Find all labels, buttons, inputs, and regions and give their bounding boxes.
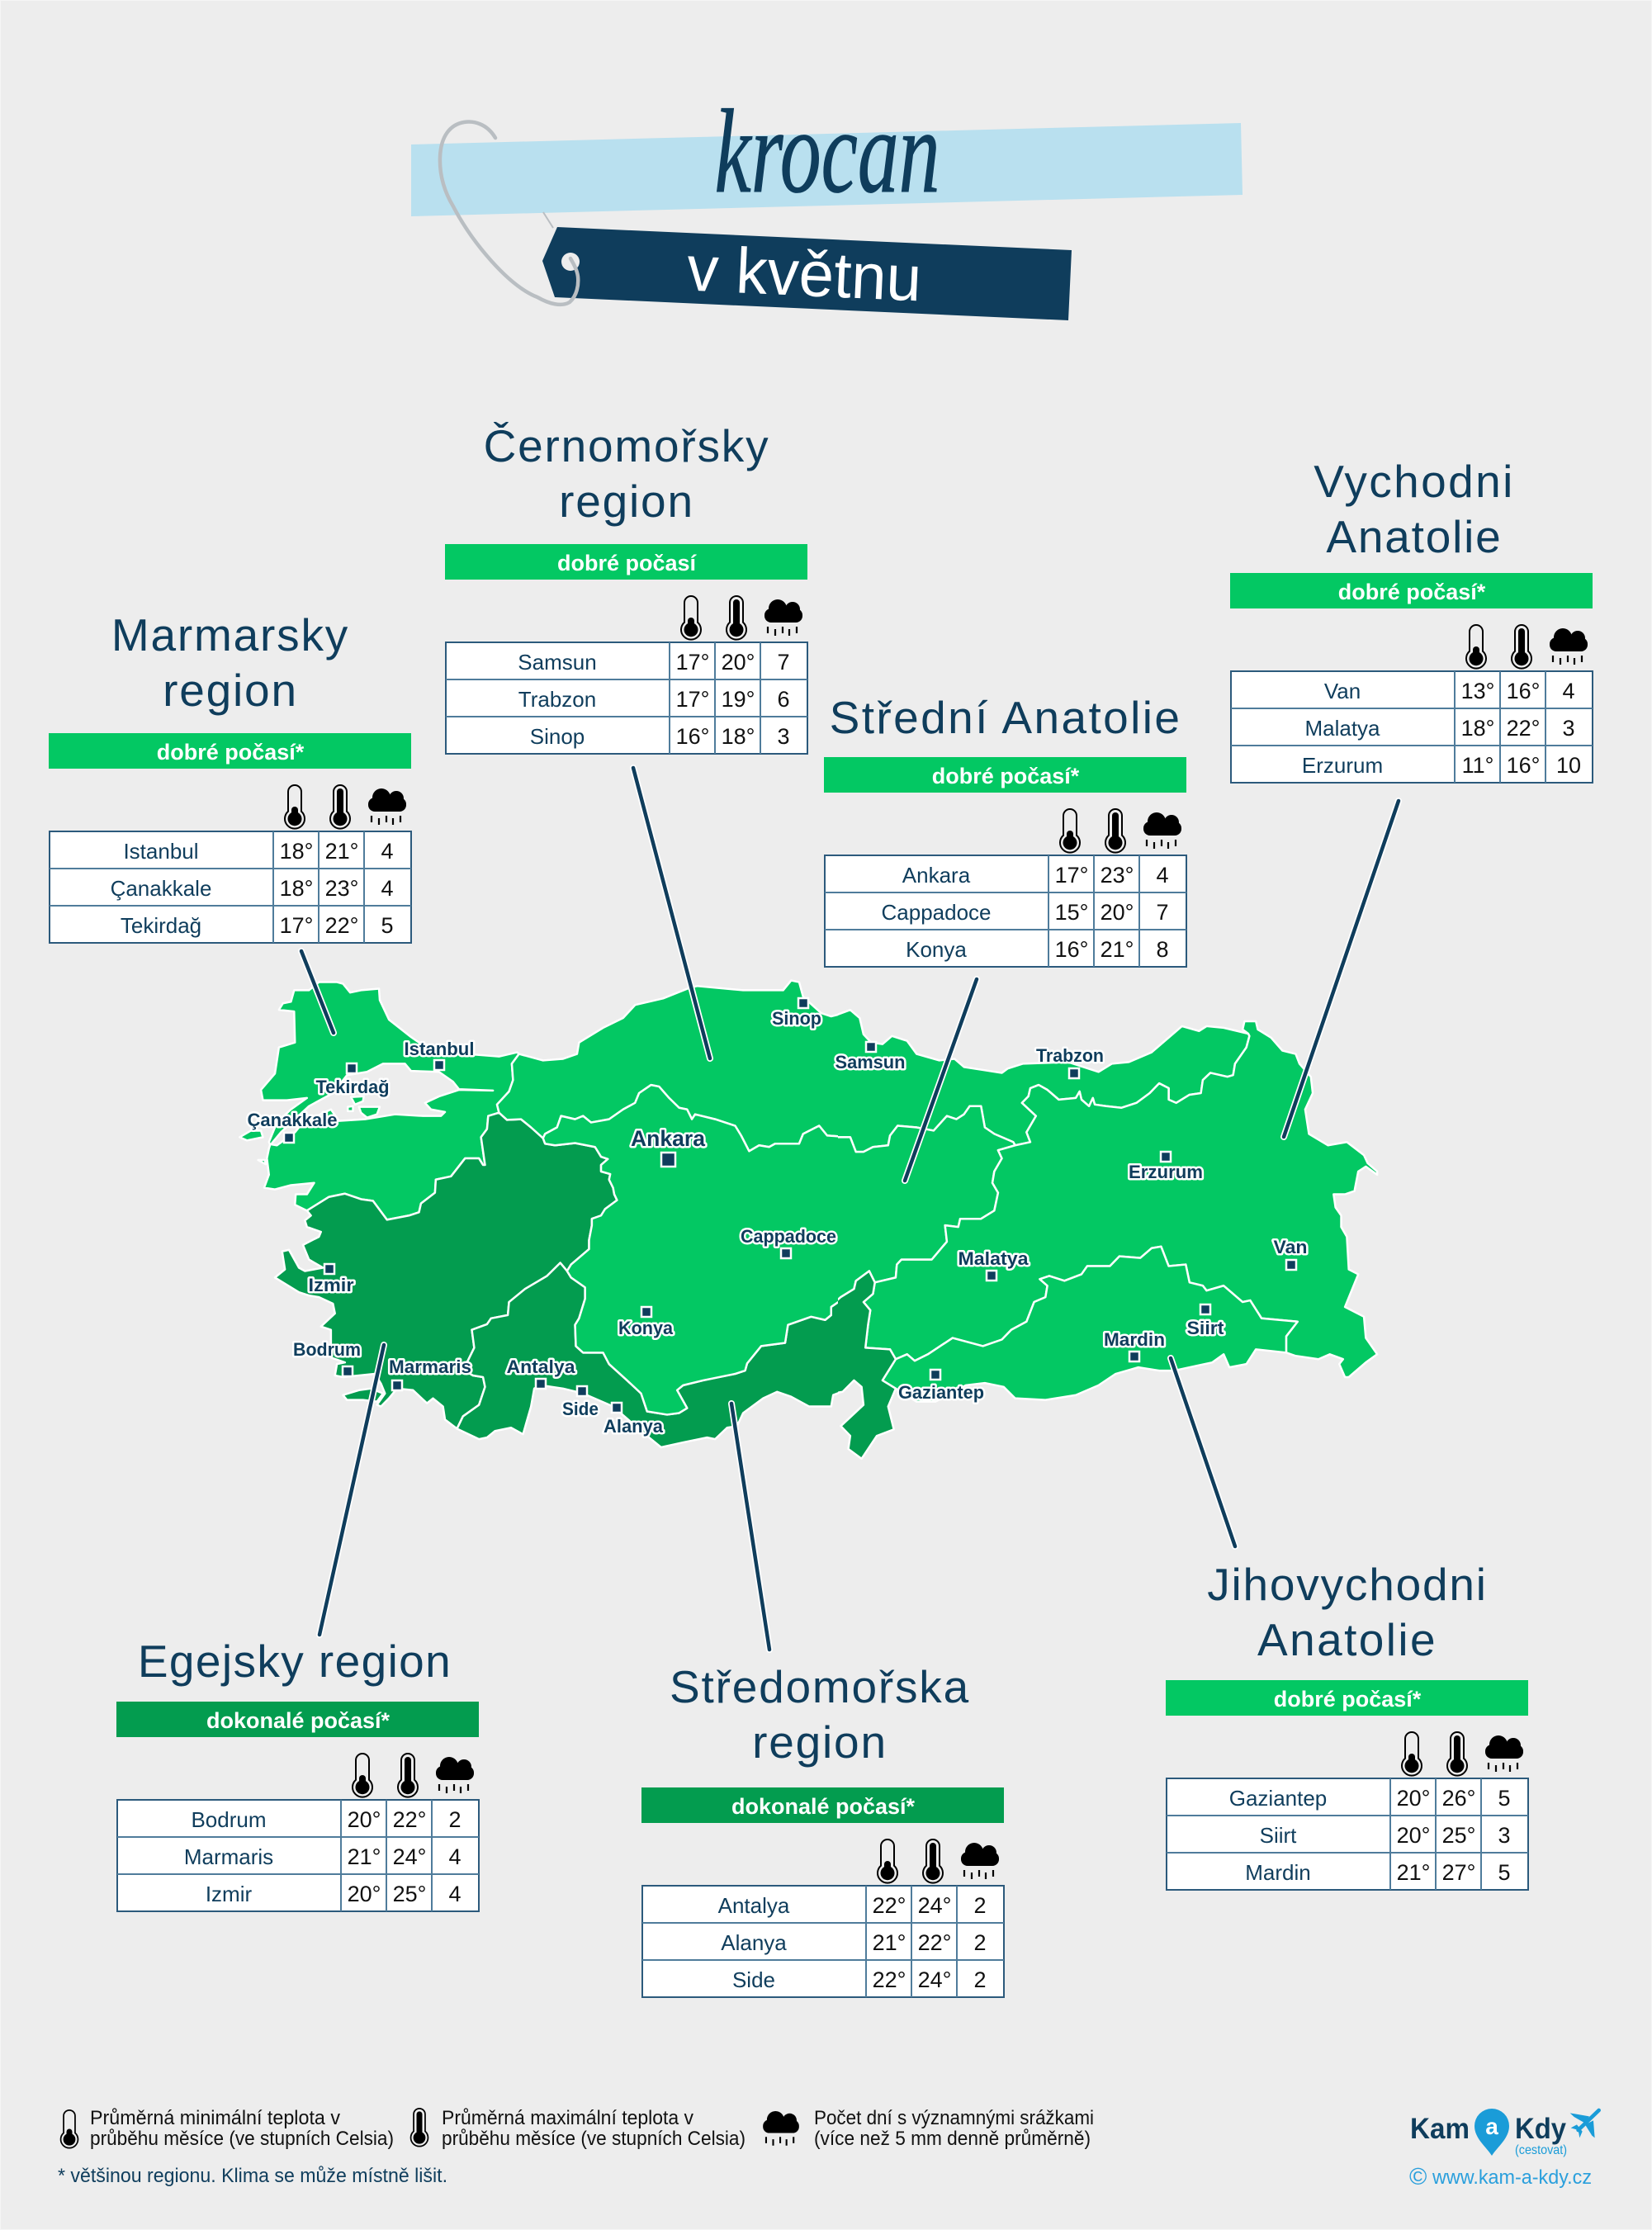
climate table: Sinop (530, 724, 585, 749)
icons (681, 596, 802, 640)
climate table: 16° (1507, 679, 1540, 703)
climate table: Erzurum (1302, 753, 1383, 778)
panel: Vychodni Anatolie (1230, 456, 1593, 783)
city labels: Ankara (631, 1126, 706, 1151)
climate table: 20° (348, 1807, 381, 1832)
heading: Egejsky region (138, 1636, 452, 1687)
region: Marmara (261, 982, 519, 1219)
panel: Jihovychodni Anatolie (1166, 1559, 1528, 1890)
legend text: minimum temperature: Průměrná minimální teplota v (90, 2107, 340, 2129)
climate table: Gaziantep (1229, 1786, 1327, 1811)
tag ring (440, 122, 578, 305)
icon: maximum thermometer (411, 2109, 428, 2147)
legend text: rainy days: Počet dní s významnými srážkami (814, 2107, 1094, 2129)
climate table: 22° (325, 913, 358, 938)
panel: Střední Anatolie (824, 692, 1186, 967)
city labels: Side (562, 1399, 599, 1419)
heading: Černomořsky (484, 420, 769, 471)
climate table: 17° (1055, 863, 1088, 888)
climate table: Ankara (902, 863, 971, 888)
weather banner (49, 733, 411, 769)
region: Central Anatolia east (838, 1105, 1015, 1298)
weather banner (641, 1787, 1004, 1823)
climate table: 21° (348, 1844, 381, 1869)
map east part (802, 1010, 1377, 1459)
climate table: Tekirdağ (121, 913, 201, 938)
climate table: 21° (1101, 937, 1134, 962)
climate table: Samsun (518, 650, 597, 675)
city labels: Antalya (507, 1356, 575, 1377)
climate table (1167, 1778, 1528, 1890)
legend text: maximum temperature: průběhu měsíce (ve stupních Celsia) (442, 2128, 746, 2150)
region: Mediterranean east (838, 1270, 897, 1460)
logo word: Kdy: Kdy (1515, 2113, 1566, 2145)
icons (878, 1839, 999, 1883)
heading: Vychodni (1314, 456, 1515, 507)
weather banner (824, 757, 1186, 793)
climate table: 20° (1397, 1823, 1430, 1848)
climate table: 2 (973, 1967, 987, 1992)
climate table: 20° (1397, 1786, 1430, 1811)
region: Black Sea west (495, 979, 838, 1149)
climate table: 20° (348, 1882, 381, 1906)
climate table: 5 (381, 913, 394, 938)
climate table: 18° (1461, 716, 1494, 741)
climate table: 16° (1507, 753, 1540, 778)
climate table: 27° (1442, 1860, 1475, 1885)
climate table: 16° (1055, 937, 1088, 962)
city labels: Marmaris (389, 1356, 471, 1377)
weather banner: dobré počasí* (1338, 580, 1486, 604)
city labels: Van (1273, 1237, 1308, 1257)
climate table: 22° (873, 1967, 906, 1992)
weather banner: dobré počasí* (1274, 1687, 1422, 1712)
climate table: Cappadoce (882, 900, 991, 925)
climate table: 4 (448, 1844, 462, 1869)
city labels: Izmir (309, 1275, 354, 1295)
panel: Egejsky region (116, 1636, 479, 1911)
panel: Marmarsky region (49, 609, 411, 943)
Sea of Marmara (271, 1063, 493, 1145)
climate table: Alanya (721, 1930, 787, 1955)
climate table: 5 (1498, 1860, 1511, 1885)
climate table: 2 (973, 1930, 987, 1955)
city labels: Mardin (1104, 1329, 1165, 1350)
climate table: Istanbul (123, 839, 199, 864)
region: Black Sea east (802, 1010, 1249, 1152)
climate table: Trabzon (518, 687, 596, 712)
city labels: Cappadoce (741, 1226, 836, 1247)
climate table: 24° (393, 1844, 426, 1869)
climate table: 17° (676, 687, 709, 712)
climate table: 3 (1498, 1823, 1511, 1848)
weather banner (1230, 573, 1593, 608)
climate table: 19° (722, 687, 755, 712)
region: Southeastern Anatolia (883, 1247, 1298, 1402)
legend text: minimum temperature: průběhu měsíce (ve stupních Celsia) (90, 2128, 394, 2150)
weather banner: dobré počasí* (157, 740, 305, 765)
city labels: Alanya (604, 1416, 664, 1437)
footnote: * většinou regionu. Klima se může místně lišit. (58, 2165, 447, 2187)
logo: Kam a Kdy (1409, 2109, 1599, 2190)
weather banner (1166, 1680, 1528, 1716)
legend text: rainy days: (více než 5 mm denně průměrně) (814, 2128, 1091, 2150)
climate table: 6 (777, 687, 790, 712)
heading: v květnu: v květnu (685, 232, 923, 315)
climate table: 10 (1556, 753, 1581, 778)
climate table: 4 (381, 839, 394, 864)
tag hole (561, 253, 580, 271)
climate table: Side (732, 1967, 775, 1992)
climate table: 26° (1442, 1786, 1475, 1811)
climate table: 8 (1156, 937, 1169, 962)
heading: Marmarsky (111, 609, 349, 660)
climate table: 11° (1462, 753, 1493, 778)
region: Mediterranean west (457, 1263, 883, 1447)
city labels (248, 1008, 1308, 1437)
region: Aegean (275, 1113, 617, 1428)
climate table: 22° (918, 1930, 951, 1955)
region: Central Anatolia west (542, 1083, 838, 1416)
panel: Černomořsky region (445, 420, 807, 754)
logo word: Kam: Kam (1410, 2113, 1470, 2145)
climate table (117, 1800, 479, 1911)
heading: Středomořska (670, 1661, 970, 1712)
climate table: 24° (918, 1967, 951, 1992)
navy tag (542, 227, 1072, 320)
climate table: Siirt (1260, 1823, 1297, 1848)
website address: www.kam-a-kdy.cz (1432, 2166, 1592, 2189)
climate table: 15° (1055, 900, 1088, 925)
city labels: Samsun (835, 1052, 905, 1072)
weather banner (116, 1702, 479, 1737)
heading: Střední Anatolie (830, 692, 1181, 743)
climate table: 18° (722, 724, 755, 749)
climate table: 18° (280, 839, 313, 864)
title: krocan v květnu (411, 86, 1243, 320)
climate table: Izmir (206, 1882, 252, 1906)
icon: rain cloud (763, 2111, 799, 2146)
logo letter: a: a (1485, 2114, 1498, 2139)
icon: minimum thermometer (61, 2110, 78, 2148)
heading: region (752, 1716, 888, 1768)
heading: krocan: krocan (715, 86, 940, 218)
city labels: Siirt (1187, 1318, 1224, 1338)
city labels: Malatya (958, 1248, 1029, 1269)
city labels: Trabzon (1036, 1045, 1104, 1066)
icon: plane (1570, 2110, 1599, 2138)
icons (1060, 809, 1181, 853)
climate table: 16° (676, 724, 709, 749)
climate table: Marmaris (184, 1844, 273, 1869)
city labels: Erzurum (1129, 1162, 1203, 1182)
thread (543, 212, 553, 228)
city labels: Tekirdağ (315, 1077, 390, 1097)
climate table: 22° (393, 1807, 426, 1832)
climate table (642, 1886, 1004, 1997)
connector lines (301, 768, 1399, 1650)
climate table: 22° (873, 1893, 906, 1918)
city labels: Istanbul (405, 1039, 474, 1059)
icons (285, 785, 406, 829)
climate table: 21° (325, 839, 358, 864)
climate table: 23° (325, 876, 358, 901)
climate table: 18° (280, 876, 313, 901)
logo subtext: (cestovat) (1515, 2143, 1567, 2157)
climate table: 25° (393, 1882, 426, 1906)
climate table: 2 (448, 1807, 462, 1832)
climate table: 3 (1562, 716, 1575, 741)
climate table: 23° (1101, 863, 1134, 888)
climate table: Bodrum (191, 1807, 267, 1832)
climate table: Çanakkale (111, 876, 211, 901)
city labels: Bodrum (293, 1339, 361, 1360)
heading: region (559, 476, 694, 527)
map of Turkey (239, 981, 1377, 1459)
climate table: 24° (918, 1893, 951, 1918)
climate table: 4 (1156, 863, 1169, 888)
climate table: 20° (1101, 900, 1134, 925)
weather banner: dobré počasí* (932, 764, 1080, 788)
climate table: 25° (1442, 1823, 1475, 1848)
climate table: Malatya (1304, 716, 1380, 741)
climate table: 17° (280, 913, 313, 938)
islands (239, 1096, 380, 1164)
climate table: 21° (873, 1930, 906, 1955)
climate table: Antalya (718, 1893, 790, 1918)
climate table: 21° (1397, 1860, 1430, 1885)
climate table: 2 (973, 1893, 987, 1918)
website: © (1409, 2164, 1427, 2190)
weather banner (445, 544, 807, 580)
climate table: 3 (777, 724, 790, 749)
climate table: 7 (1156, 900, 1169, 925)
city markers (284, 998, 1296, 1413)
heading: region (163, 665, 298, 716)
icons (1466, 625, 1588, 669)
climate table: Mardin (1245, 1860, 1311, 1885)
climate table (1231, 671, 1593, 783)
climate table (825, 855, 1186, 967)
climate table (446, 642, 807, 754)
weather banner: dobré počasí (557, 551, 698, 575)
climate table: 7 (777, 650, 790, 675)
heading: Anatolie (1326, 511, 1503, 562)
weather banner: dokonalé počasí* (731, 1794, 916, 1819)
icons (1402, 1732, 1523, 1776)
city labels: Konya (618, 1318, 674, 1338)
climate table (50, 831, 411, 943)
panel: Středomořska region (641, 1661, 1004, 1997)
legend (58, 2107, 1094, 2187)
climate table: 17° (676, 650, 709, 675)
Datça peninsula (343, 1389, 383, 1402)
climate table: 20° (722, 650, 755, 675)
climate table: 4 (1562, 679, 1575, 703)
city labels: Sinop (772, 1008, 821, 1029)
icon: map pin (1474, 2109, 1509, 2156)
weather banner: dokonalé počasí* (206, 1708, 391, 1733)
climate table: 13° (1461, 679, 1494, 703)
heading: Anatolie (1257, 1614, 1437, 1665)
climate table: 22° (1507, 716, 1540, 741)
icons (353, 1754, 474, 1797)
climate table: 4 (448, 1882, 462, 1906)
climate table: 4 (381, 876, 394, 901)
region: Eastern Anatolia (864, 1021, 1377, 1377)
climate table: 5 (1498, 1786, 1511, 1811)
light blue title band (411, 123, 1243, 216)
city labels: Çanakkale (248, 1110, 337, 1130)
map west part (239, 981, 883, 1447)
heading: Jihovychodni (1207, 1559, 1488, 1610)
climate table: Van (1324, 679, 1361, 703)
city labels: Gaziantep (898, 1382, 984, 1403)
legend text: maximum temperature: Průměrná maximální teplota v (442, 2107, 693, 2129)
climate table: Konya (906, 937, 967, 962)
